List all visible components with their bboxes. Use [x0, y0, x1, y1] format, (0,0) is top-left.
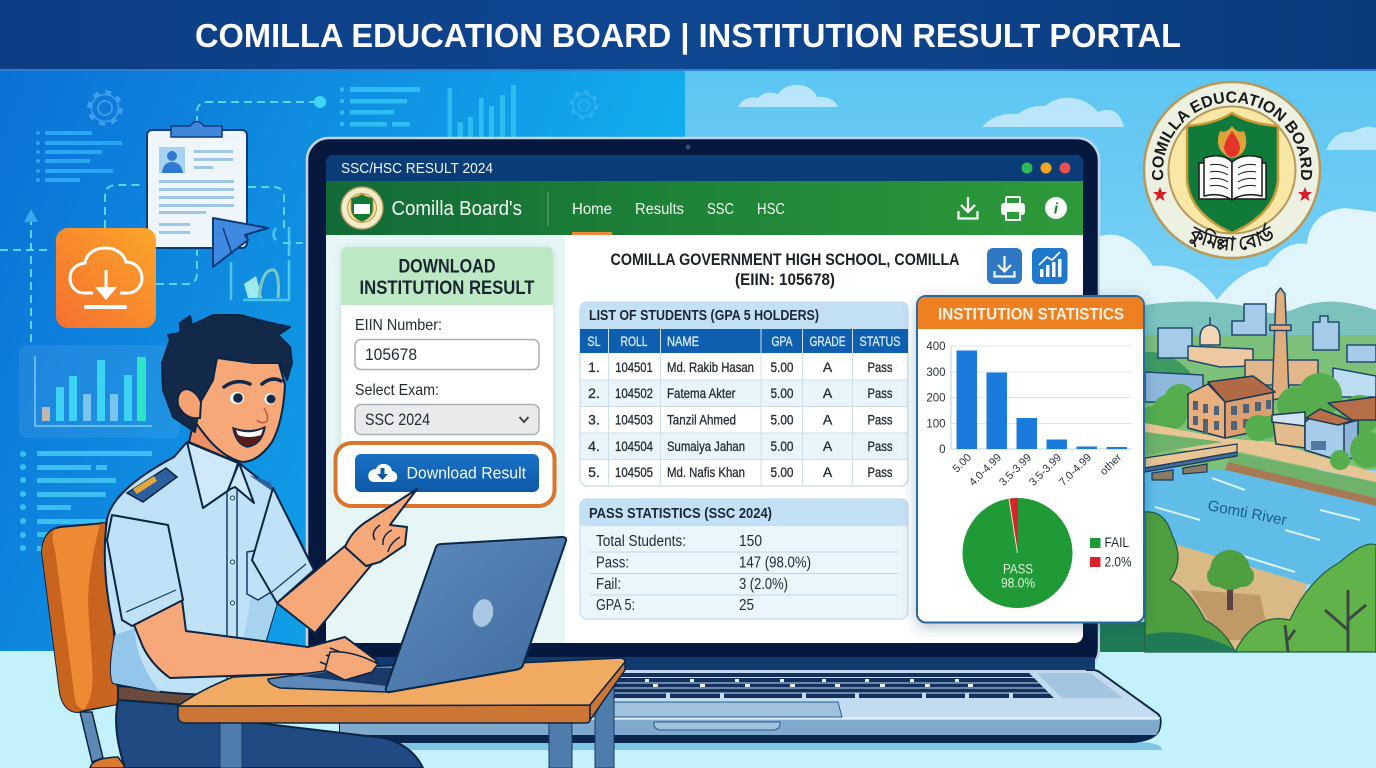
low tan building and blue house: [1272, 397, 1376, 462]
table rows: Md. Rakib Hasan: [667, 359, 754, 375]
seal text: COMILLA EDUCATION BOARD: [1152, 91, 1312, 180]
belt: [118, 686, 200, 706]
panel: pass statistics: 3 (2.0%): [739, 576, 788, 593]
pie chart: 98.0%: [1001, 576, 1035, 590]
school heading: (EIIN: 105678): [735, 270, 835, 289]
ear: [178, 389, 201, 418]
pie chart: PASS: [1003, 562, 1033, 576]
table rows: Fatema Akter: [667, 385, 736, 401]
hand on keyboard: [325, 652, 378, 680]
table rows: 5.00: [770, 359, 794, 375]
trees behind: [1141, 373, 1376, 435]
table rows: 5.: [588, 464, 600, 480]
seal stars: [1153, 187, 1312, 201]
monitor frame: [307, 138, 1099, 671]
icon: paper plane cursor: [213, 218, 268, 267]
brick building: [1188, 376, 1275, 438]
table rows: 104503: [615, 412, 653, 428]
green navigation bar: Home: [572, 201, 612, 218]
bar chart: 4.0-4.99: [967, 452, 1004, 489]
button: download result: [355, 454, 539, 492]
table rows: Tanzil Ahmed: [667, 412, 736, 428]
table rows: Pass: [868, 385, 892, 401]
background: floor: [0, 651, 1376, 768]
table header: STATUS: [860, 333, 900, 349]
table header: GRADE: [810, 333, 846, 349]
panel heading: INSTITUTION RESULT: [360, 278, 535, 299]
bar chart: 100: [926, 418, 946, 430]
green navigation bar: SSC: [707, 201, 734, 218]
bar chart: 3.5-3.99: [997, 452, 1034, 489]
chair: [42, 523, 126, 768]
select: exam: [355, 404, 539, 434]
table rows: A: [823, 438, 833, 454]
pie legend: 2.0%: [1104, 554, 1132, 570]
tree by brick building: [1245, 415, 1279, 441]
shirt: [105, 442, 314, 695]
table rows: Md. Nafis Khan: [667, 464, 745, 480]
panel: pass statistics: Total Students:: [596, 533, 686, 550]
panel: pass statistics: PASS STATISTICS (SSC 2024): [589, 505, 772, 522]
title: COMILLA EDUCATION BOARD | INSTITUTION RESULT PORTAL: [195, 17, 1181, 54]
background: tech blue left side: [0, 70, 686, 652]
panel: pass statistics: Fail:: [596, 576, 621, 593]
bar chart: [926, 341, 1132, 489]
table rows: A: [823, 412, 833, 428]
green navigation bar: Comilla Board's: [392, 198, 522, 220]
table rows: Pass: [868, 438, 892, 454]
bar chart: 7.0-4.99: [1057, 452, 1094, 489]
card heading: INSTITUTION STATISTICS: [938, 306, 1124, 324]
pointing arm and hand: [252, 488, 417, 633]
bar chart: 200: [926, 392, 946, 404]
bar chart: other: [1098, 451, 1124, 478]
table rows: Sumaiya Jahan: [667, 438, 745, 454]
clouds: [738, 85, 1376, 150]
table header: SL: [588, 333, 601, 349]
table header: [580, 329, 908, 353]
panel: pass statistics: 25: [739, 597, 754, 614]
far bank: [1145, 423, 1376, 482]
right-side city scene: [738, 85, 1376, 652]
input: EIIN: [355, 340, 539, 370]
panel: pass statistics: 150: [739, 533, 762, 550]
resting arm and hand: [107, 515, 376, 678]
green navigation bar: HSC: [757, 201, 785, 218]
select: exam: SSC 2024: [365, 410, 430, 429]
shore and foreground trees: [1165, 543, 1307, 652]
window title bar: SSC/HSC RESULT 2024: [341, 160, 493, 177]
panel: pass statistics: [580, 499, 908, 619]
table rows: 5.00: [770, 438, 794, 454]
icon: orange cloud download tile: [56, 228, 156, 328]
table rows: 5.00: [770, 385, 794, 401]
green navigation bar: Results: [635, 201, 684, 218]
table rows: Pass: [868, 359, 892, 375]
panel: download institution result form: EIIN Number:: [355, 317, 442, 334]
table header: NAME: [667, 333, 699, 349]
foreground laptop: [268, 537, 566, 692]
panel: pass statistics: Pass:: [596, 554, 629, 572]
sidebar background: [326, 235, 565, 643]
trees right of house: [1330, 432, 1376, 470]
bridge: [1145, 444, 1237, 480]
panel heading: DOWNLOAD: [398, 256, 496, 278]
icon button: chart: [1032, 248, 1068, 284]
bar chart: 300: [926, 367, 946, 379]
icon: download: [958, 197, 978, 218]
table rows: Pass: [868, 464, 892, 480]
table rows: 3.: [588, 412, 600, 428]
neck and head: [162, 315, 292, 463]
bar chart: 400: [926, 341, 946, 353]
pie chart: [962, 498, 1072, 608]
river label: Gomti River: [1206, 497, 1288, 529]
panel: list of GPA 5 holders: [580, 302, 908, 486]
student character at desk: [42, 315, 423, 768]
table rows: 104504: [615, 438, 653, 454]
input: EIIN: 105678: [365, 345, 417, 364]
panel: download institution result form: Select Exam:: [355, 382, 439, 399]
icon: info: [1045, 197, 1067, 219]
background: sky right side: [685, 70, 1376, 652]
table rows: [588, 359, 892, 480]
big laptop base with keyboard: [340, 670, 1162, 750]
buildings: [1145, 288, 1376, 402]
flame: [1218, 126, 1246, 158]
icon: clipboard with student profile: [147, 122, 247, 248]
panel: institution statistics: [917, 296, 1144, 622]
orange highlight around button: [336, 443, 554, 506]
trousers: [116, 700, 423, 768]
table rows: 4.: [588, 438, 600, 454]
header banner: [0, 0, 1376, 71]
panel: list of GPA 5 holders: LIST OF STUDENTS (GPA 5 HOLDERS): [589, 307, 819, 324]
table rows: 104501: [615, 359, 653, 375]
icon: info: i: [1054, 200, 1059, 218]
table rows: A: [823, 359, 833, 375]
panel: download institution result form: [336, 247, 554, 506]
school heading: COMILLA GOVERNMENT HIGH SCHOOL, COMILLA: [610, 250, 960, 269]
pie legend: [1090, 535, 1132, 570]
table rows: 104505: [615, 464, 653, 480]
table rows: Pass: [868, 412, 892, 428]
table rows: 104502: [615, 385, 653, 401]
table rows: A: [823, 464, 833, 480]
bar chart: 3.5-3.99: [1027, 452, 1064, 489]
icon button: download: [987, 248, 1022, 284]
table header: ROLL: [620, 333, 648, 349]
river: [1145, 465, 1376, 590]
green navigation bar: [326, 181, 1083, 235]
window title bar: [326, 155, 1083, 181]
desk: [178, 658, 625, 768]
table rows: 5.00: [770, 412, 794, 428]
bar chart: 5.00: [950, 452, 974, 475]
panel: pass statistics: 147 (98.0%): [739, 554, 811, 572]
table header: GPA: [772, 333, 793, 349]
open book: [1199, 156, 1266, 200]
table rows: 5.00: [770, 464, 794, 480]
pie legend: FAIL: [1104, 535, 1129, 550]
card heading: [918, 297, 1143, 329]
table rows: A: [823, 385, 833, 401]
icon: printer: [1001, 197, 1025, 220]
emblem: Comilla Education Board seal: [1142, 80, 1322, 260]
table rows: 2.: [588, 385, 600, 401]
button: download result: Download Result: [406, 464, 526, 482]
table rows: 1.: [588, 359, 600, 375]
bar chart: 0: [939, 444, 946, 456]
icon: small board logo: [341, 187, 383, 229]
seal text: Bengali: কুমিল্লা বোর্ড: [1189, 222, 1273, 251]
tech decoration: lists, gears and small charts: [0, 85, 597, 551]
panel: pass statistics: GPA 5:: [596, 597, 635, 614]
